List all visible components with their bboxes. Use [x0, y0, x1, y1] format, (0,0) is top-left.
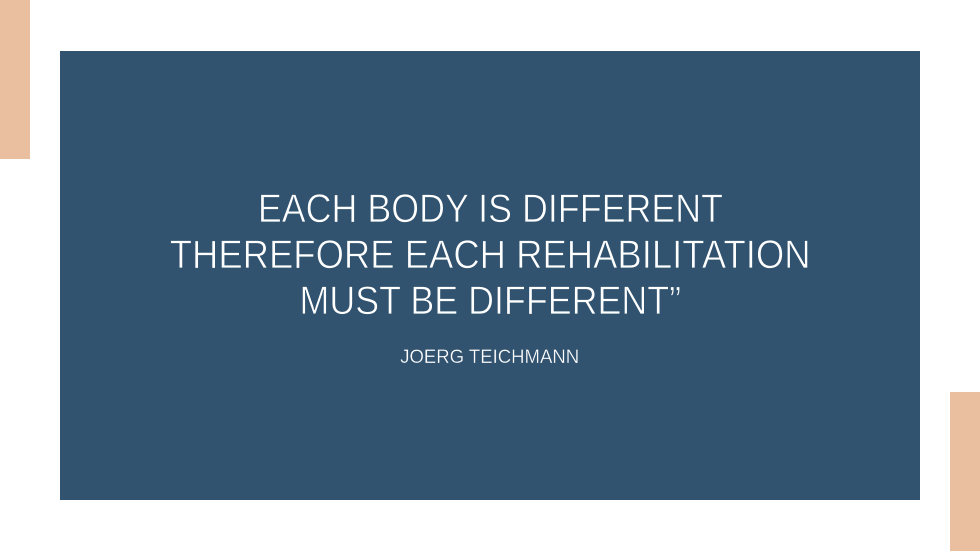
quote text: THEREFORE EACH REHABILITATION [170, 233, 810, 277]
quote text [170, 187, 810, 323]
panel: quote background [60, 51, 920, 500]
accent bar: bottom right [950, 392, 980, 551]
quote text: EACH BODY IS DIFFERENT [257, 187, 723, 231]
accent bar: top left [0, 0, 30, 159]
quote text: MUST BE DIFFERENT” [299, 279, 681, 323]
attribution: JOERG TEICHMANN [401, 347, 579, 368]
